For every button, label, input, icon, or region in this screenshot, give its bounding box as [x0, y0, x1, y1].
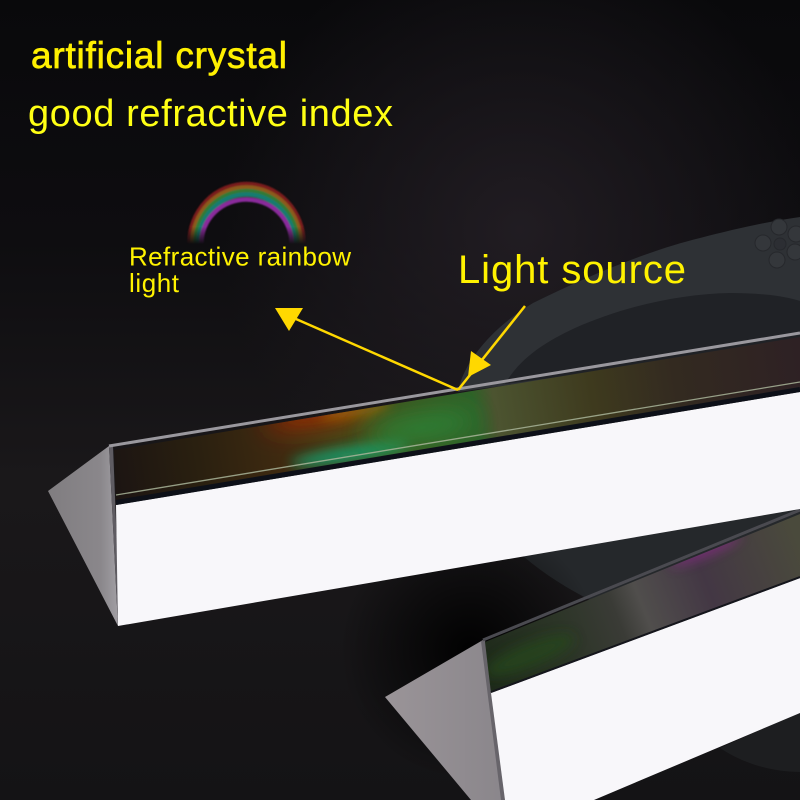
back prism	[385, 500, 800, 800]
prism mirrored top strip	[485, 514, 800, 693]
label: refractive rainbow light: Refractive rainbow	[129, 242, 351, 272]
prism end face	[48, 446, 118, 626]
label: refractive rainbow light: light	[129, 268, 180, 298]
icon: rainbow arc	[187, 181, 306, 243]
heading: artificial crystal: artificial crystal	[31, 35, 287, 76]
heading: good refractive index: good refractive index	[28, 93, 393, 135]
arrow: light source to prism	[458, 306, 525, 390]
icon: flower carving on bowl	[755, 219, 800, 268]
prism white side	[491, 578, 800, 800]
prism mirrored rainbow strip	[116, 337, 800, 497]
prism white side	[116, 392, 800, 626]
prism end face	[385, 640, 505, 800]
arrow: reflected ray to rainbow label	[275, 308, 458, 390]
front prism	[48, 330, 800, 626]
label: light source: Light source	[458, 248, 686, 292]
ink stone bowl behind the prisms	[330, 217, 800, 800]
